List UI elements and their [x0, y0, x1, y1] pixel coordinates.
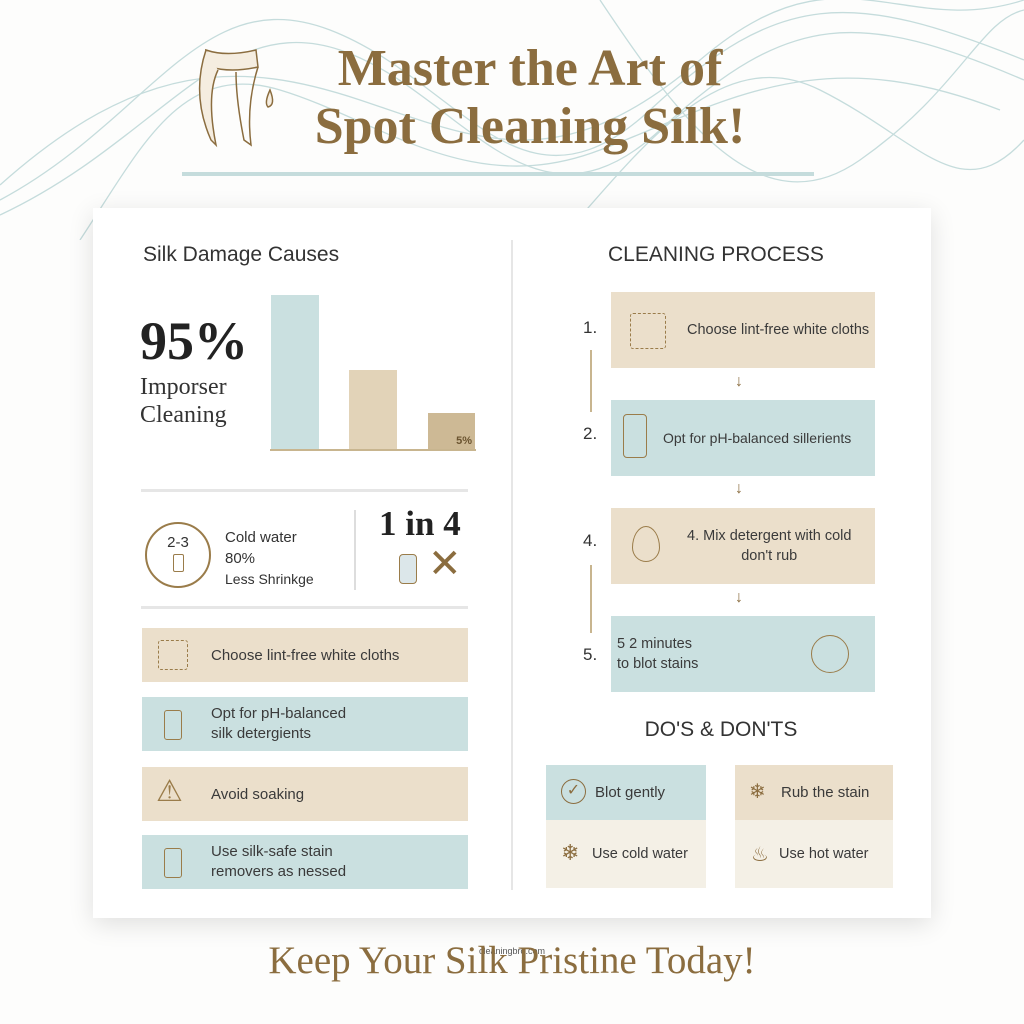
text: Opt for pH-balanced sillerients [663, 430, 851, 446]
text: removers as nessed [211, 863, 346, 880]
panel: cleaning process: CLEANING PROCESS [608, 243, 824, 266]
tips list [142, 628, 468, 682]
don'ts column: Use hot water [779, 846, 868, 862]
steps [611, 292, 875, 368]
text: 4. Mix detergent with cold [687, 528, 851, 544]
panel: silk damage causes: 80% [225, 550, 255, 567]
text: Opt for pH-balanced [211, 705, 346, 722]
text: to blot stains [617, 656, 698, 672]
do's column: ❄ [561, 840, 579, 865]
icon: silk scarf with drop [198, 48, 274, 148]
do's column: ✓ [567, 782, 580, 799]
panel: silk damage causes: Imporser [140, 374, 227, 400]
don'ts column: Rub the stain [781, 784, 869, 801]
panel: silk damage causes: ✕ [428, 542, 462, 586]
background waves [0, 0, 1024, 240]
bar chart: 5% [456, 435, 472, 447]
panel: cleaning process: 2. [583, 424, 597, 443]
panel: cleaning process: ↓ [735, 589, 743, 606]
stat: 1 in 4: 1 in 4 [379, 504, 461, 543]
stat row [145, 522, 211, 588]
text: Keep Your Silk Pristine Today! [268, 939, 756, 982]
text: Avoid soaking [211, 786, 304, 802]
footer: cleaningbro.com [479, 946, 545, 956]
don'ts column: ♨ [751, 844, 769, 866]
stat: 95%: 95% [140, 311, 248, 371]
do's column [546, 765, 706, 888]
panel: silk damage causes: Cold water [225, 529, 297, 546]
panel: cleaning process [583, 243, 824, 664]
heading: do's & don'ts: DO'S & DON'TS [645, 718, 797, 741]
text: Use silk-safe stain [211, 843, 333, 860]
panel: silk damage causes: Cleaning [140, 402, 227, 428]
tips list: Choose lint-free white cloths [211, 646, 399, 664]
panel: silk damage causes [140, 243, 476, 609]
text: ⚠ [156, 775, 183, 808]
title [315, 40, 745, 155]
main card [93, 208, 931, 918]
panel: cleaning process: 1. [583, 318, 597, 337]
steps: Choose lint-free white cloths [687, 322, 869, 338]
title: Master the Art of [338, 40, 722, 97]
panel: cleaning process: 5. [583, 645, 597, 664]
do's column: Use cold water [592, 846, 688, 862]
don'ts column: ❄ [749, 781, 766, 803]
heading: Silk Damage Causes [143, 243, 339, 266]
panel: cleaning process: ↓ [735, 480, 743, 497]
stat row: 2-3 [167, 534, 189, 551]
panel: cleaning process: 4. [583, 531, 597, 550]
don'ts column [735, 765, 893, 888]
panel: cleaning process: ↓ [735, 373, 743, 390]
bar chart [270, 295, 476, 451]
title: Spot Cleaning Silk! [315, 98, 745, 155]
text: don't rub [741, 548, 797, 564]
tip icons [158, 640, 188, 670]
text: silk detergients [211, 725, 311, 742]
do's column: Blot gently [595, 784, 665, 801]
text: 5 2 minutes [617, 636, 692, 652]
panel: silk damage causes: Less Shrinkge [225, 571, 314, 587]
